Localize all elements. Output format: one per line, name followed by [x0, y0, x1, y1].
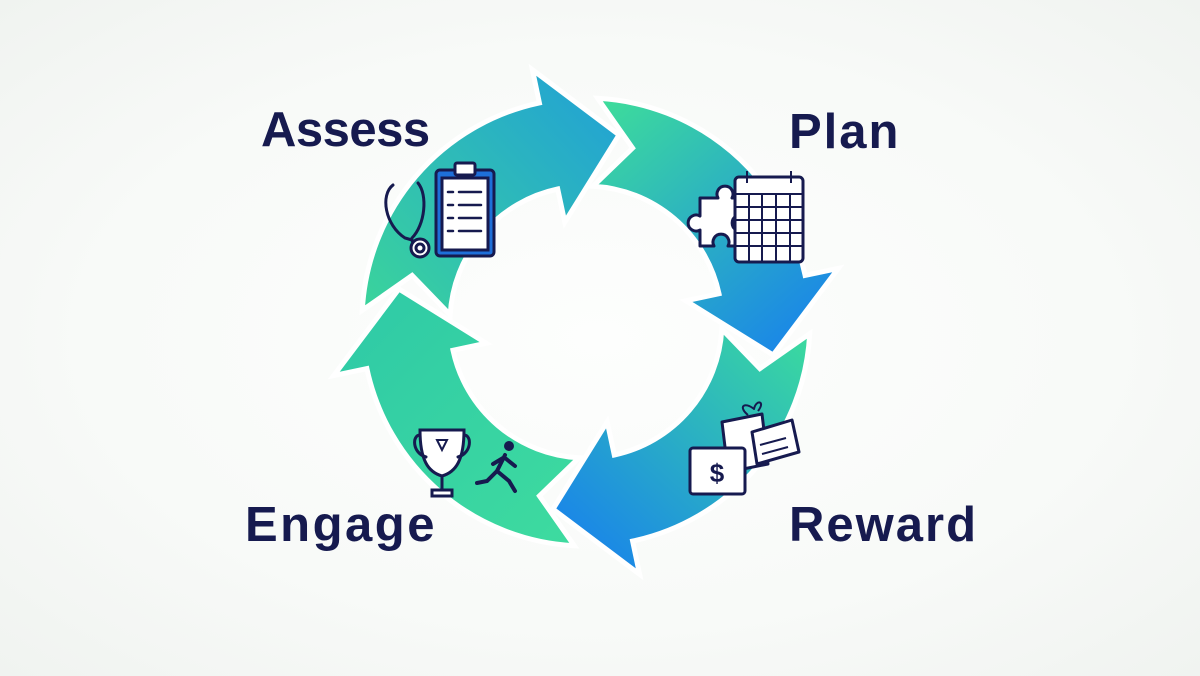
icon: puzzle and calendar [688, 171, 803, 262]
label: Engage: Engage [245, 498, 437, 552]
arrow: plan segment [593, 98, 838, 355]
icon: stethoscope and clipboard [386, 163, 494, 257]
icon: trophy and runner [415, 430, 515, 496]
label: Plan: Plan [789, 105, 900, 159]
arrow: assess segment [362, 70, 619, 315]
icon: money and gift cards: $ [710, 458, 725, 488]
label: Assess: Assess [261, 103, 430, 157]
label: Reward: Reward [789, 498, 978, 552]
icon: money and gift cards [690, 402, 799, 494]
arrow: reward segment [553, 329, 810, 574]
arrow: engage segment [334, 289, 579, 546]
